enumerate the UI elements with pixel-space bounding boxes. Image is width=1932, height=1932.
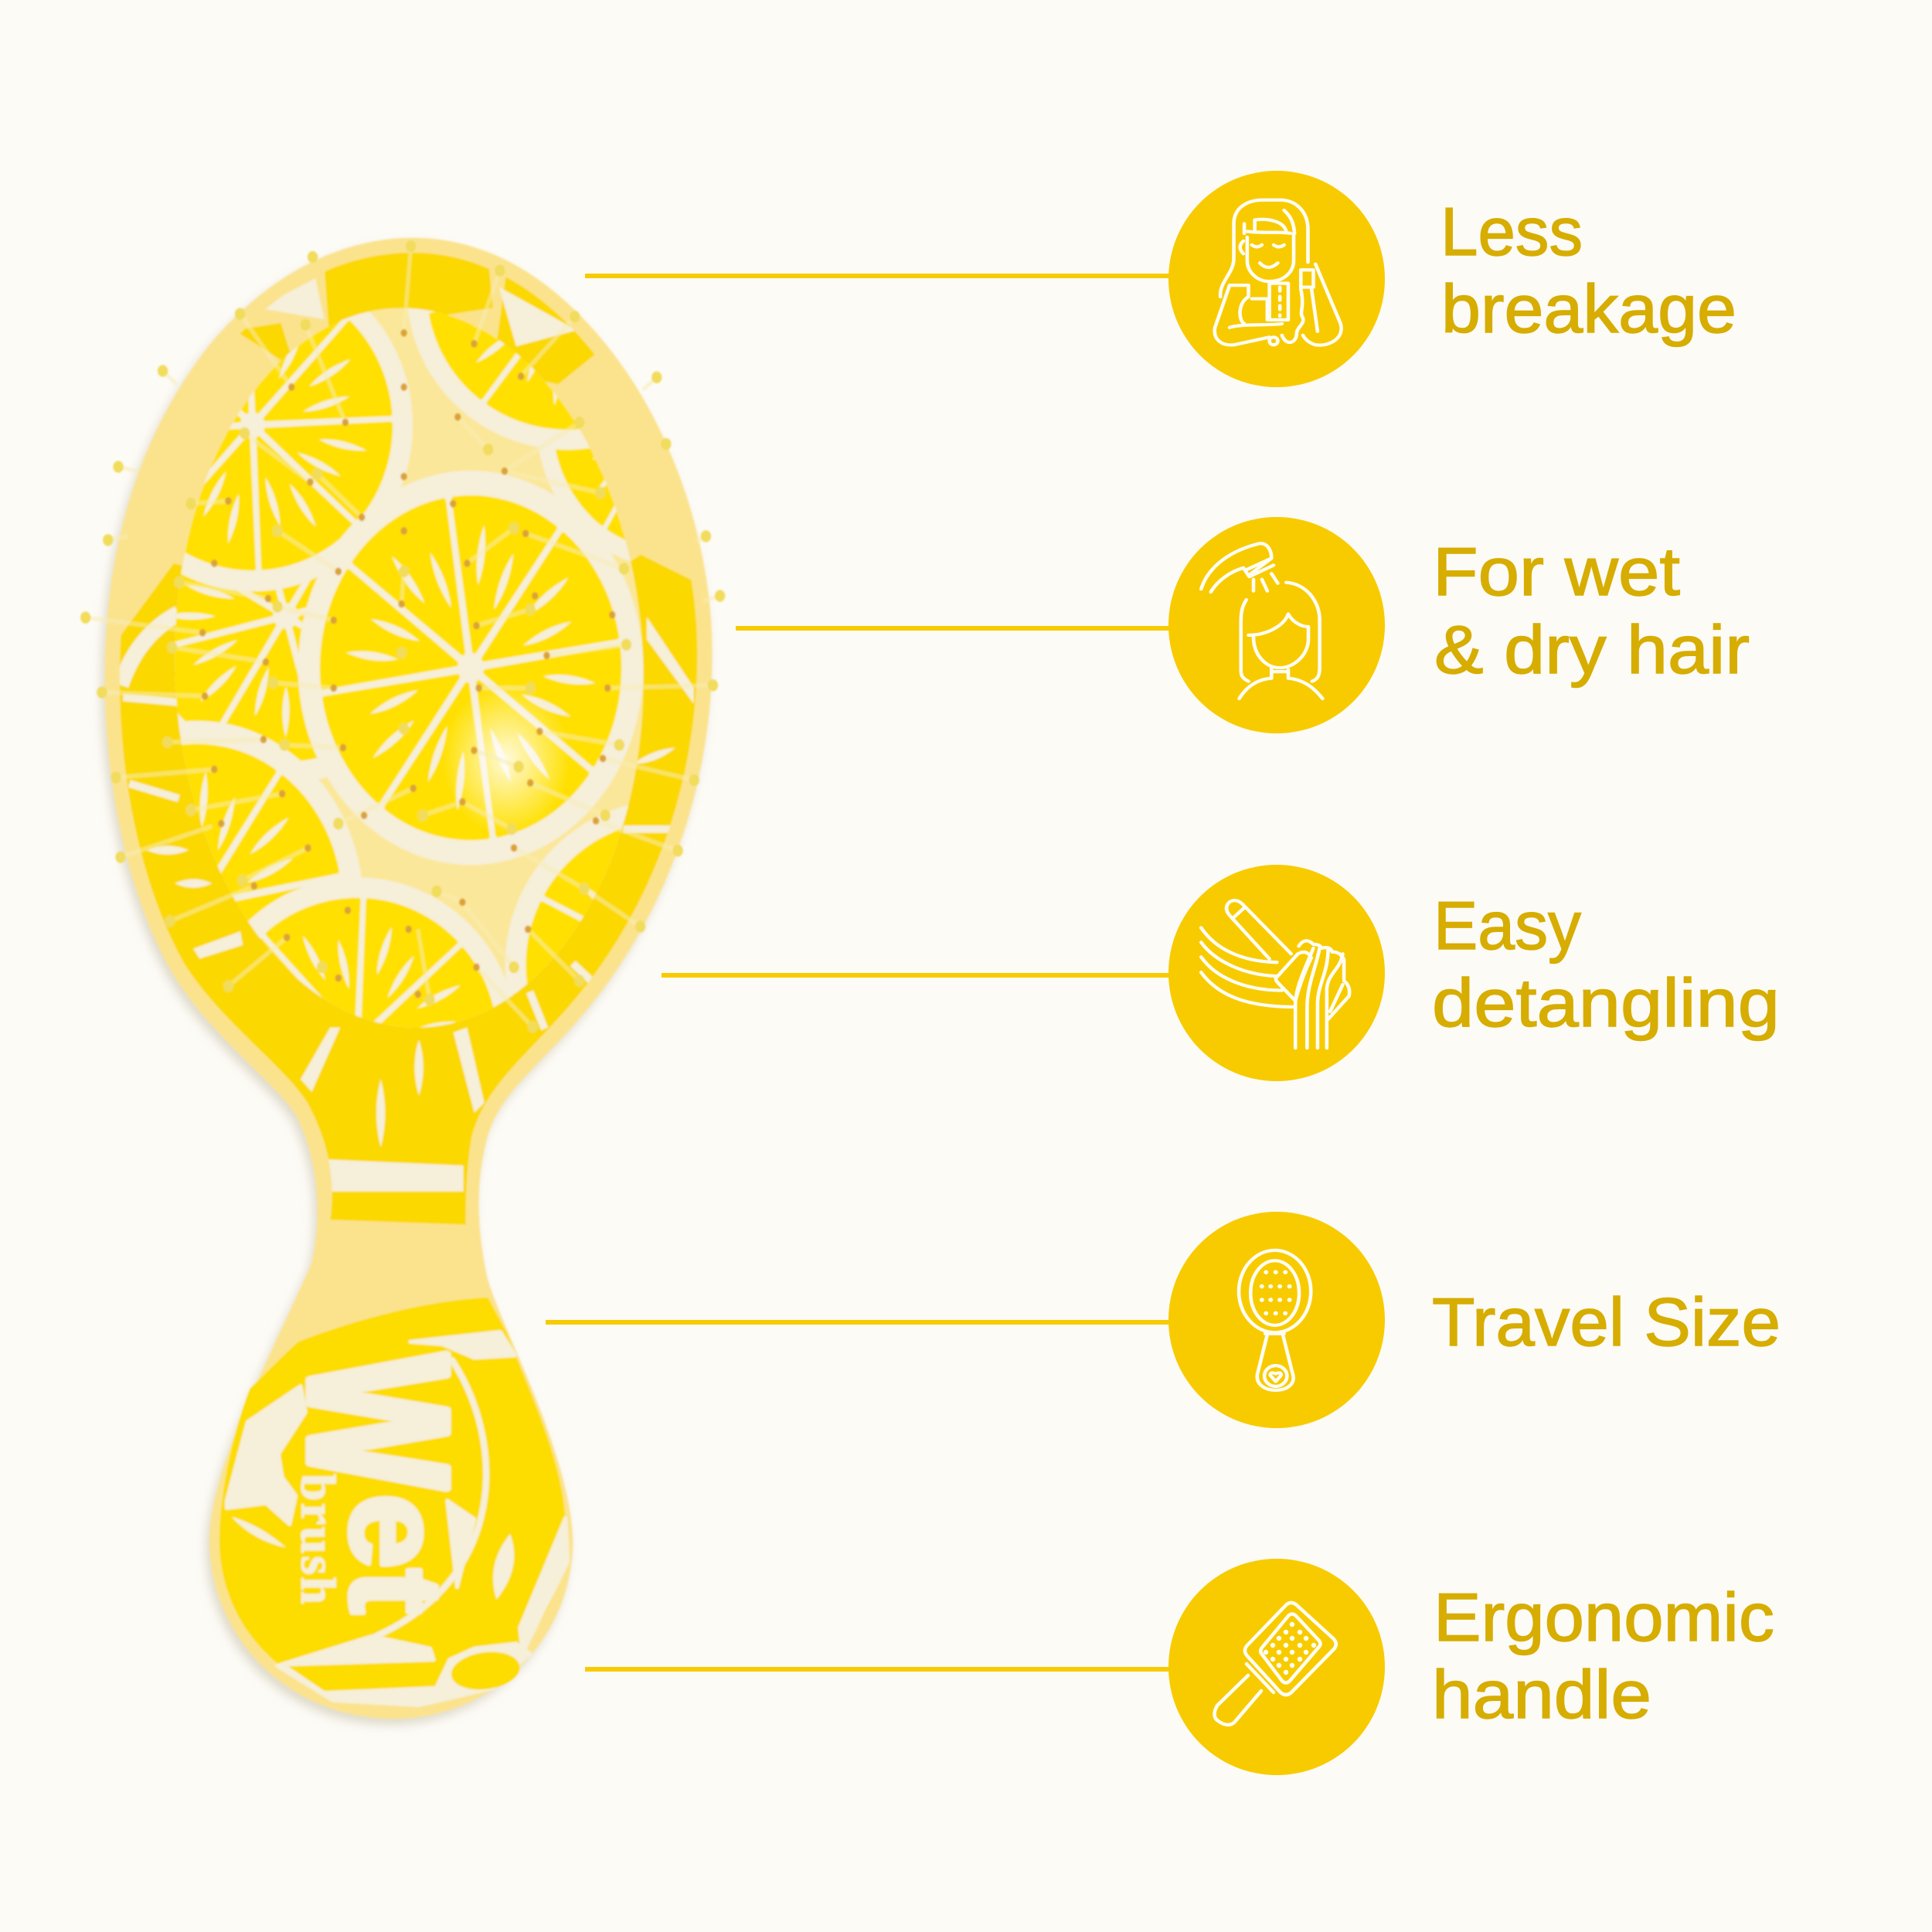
bristle tips bbox=[86, 247, 720, 1027]
connector line: easy detangling bbox=[662, 973, 1172, 978]
feature: for wet and dry hair bbox=[1168, 517, 1750, 733]
label: Ergonomic bbox=[1434, 1579, 1774, 1655]
connector line: less breakage bbox=[585, 274, 1172, 278]
icon: woman brushing hair bbox=[1215, 200, 1342, 345]
badge circle bbox=[1168, 1559, 1385, 1775]
label line 2: & dry hair bbox=[1434, 611, 1750, 688]
logo: Wet brush: brush bbox=[291, 1474, 346, 1604]
badge circle bbox=[1168, 1212, 1385, 1428]
bristle bases bbox=[202, 333, 612, 995]
bristles bbox=[86, 247, 720, 1027]
outer lemon print bbox=[119, 252, 699, 1226]
connector line: travel size bbox=[546, 1320, 1172, 1325]
logo: Wet brush: et bbox=[323, 1493, 469, 1614]
feature: ergonomic handle bbox=[1168, 1559, 1774, 1775]
handle print with logo bbox=[219, 1298, 568, 1706]
connector line: ergonomic handle bbox=[585, 1667, 1172, 1672]
icon: shower over hair bbox=[1201, 543, 1322, 699]
label line 2: handle bbox=[1432, 1656, 1651, 1733]
label: Travel Size bbox=[1432, 1284, 1781, 1360]
icon: paddle brush bbox=[1215, 1603, 1336, 1725]
label: Less bbox=[1440, 193, 1583, 270]
label line 2: breakage bbox=[1441, 270, 1736, 347]
bristle stems bbox=[86, 247, 720, 1027]
connector line: wet and dry hair bbox=[736, 626, 1172, 631]
icon: hand detangling hair bbox=[1201, 900, 1349, 1048]
feature: less breakage bbox=[1168, 171, 1736, 387]
brush shadow bbox=[101, 244, 709, 1725]
feature: travel size bbox=[1168, 1212, 1781, 1428]
brush body bbox=[105, 238, 713, 1719]
label: For wet bbox=[1433, 533, 1680, 610]
logo: Wet brush: W bbox=[268, 1354, 488, 1488]
badge circle bbox=[1168, 517, 1385, 733]
feature: easy detangling bbox=[1168, 865, 1780, 1081]
label: Easy bbox=[1434, 887, 1581, 964]
label line 2: detangling bbox=[1432, 964, 1780, 1041]
cushion pad with lemon slices bbox=[173, 306, 645, 1029]
icon: small round brush bbox=[1239, 1250, 1311, 1390]
brush product illustration bbox=[79, 236, 726, 1730]
badge circle bbox=[1168, 171, 1385, 387]
badge circle bbox=[1168, 865, 1385, 1081]
